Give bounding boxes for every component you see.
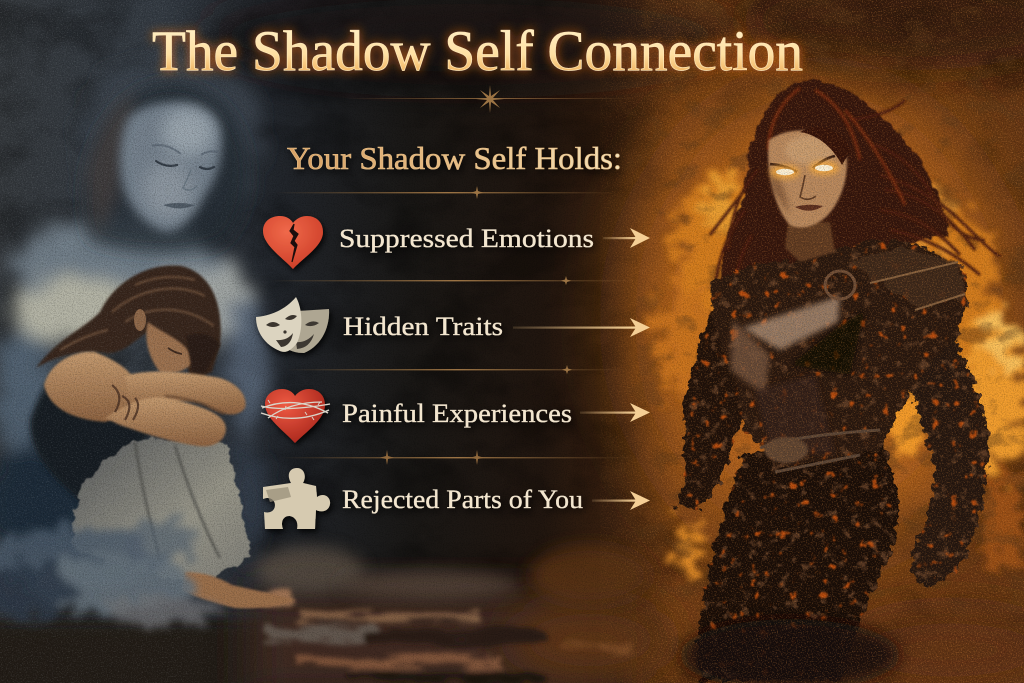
- icon: broken heart: [263, 216, 323, 269]
- panel: left mist and ghostly self: [0, 55, 268, 560]
- ground streaks: [262, 592, 630, 683]
- burnt blotches: [637, 0, 1024, 596]
- ornamental divider: top: [345, 85, 635, 113]
- face: [768, 130, 847, 228]
- face: [146, 322, 193, 373]
- lower forearm: [105, 397, 226, 446]
- divider 3: [285, 365, 630, 374]
- divider 1: [275, 186, 620, 199]
- lower armour skirt: [698, 445, 899, 680]
- ear: [134, 309, 146, 331]
- illustration: fiery warrior: [672, 80, 1000, 683]
- icon: puzzle piece: [263, 468, 330, 529]
- illustration: seated woman: [0, 265, 296, 625]
- upper forearm: [125, 372, 246, 414]
- hair: [36, 265, 221, 380]
- brows: [770, 156, 835, 172]
- arrow: [580, 403, 650, 422]
- hair back: [721, 80, 950, 300]
- divider 4: [280, 450, 635, 465]
- dress: [73, 438, 251, 582]
- row: hidden traits: [256, 297, 650, 353]
- belt buckle: [764, 437, 808, 463]
- label: Suppressed Emotions: [339, 224, 594, 253]
- mist cloud: [0, 55, 268, 560]
- arrow: [513, 318, 650, 337]
- hair strands: [710, 88, 1000, 300]
- flames: [657, 170, 1024, 577]
- label: Hidden Traits: [343, 312, 503, 341]
- hair over face: [186, 333, 220, 375]
- label: Rejected Parts of You: [342, 485, 583, 514]
- icon: heart with thorns: [261, 389, 330, 443]
- ghost woman: [84, 83, 249, 252]
- pauldron: [850, 246, 966, 310]
- row: rejected parts: [263, 468, 650, 529]
- left arm: [672, 300, 750, 510]
- panel: right fire: [600, 0, 1024, 683]
- dark top: [30, 350, 150, 505]
- mist over legs: [0, 518, 215, 625]
- torso armour: [711, 240, 968, 470]
- belt: [760, 430, 880, 472]
- label: Painful Experiences: [342, 399, 572, 428]
- shoulder and upper arm: [44, 352, 135, 422]
- row: suppressed emotions: [263, 216, 650, 269]
- divider 2: [270, 276, 640, 285]
- ring buckle: [825, 271, 855, 299]
- right arm and gauntlet: [905, 295, 989, 586]
- row: painful experiences: [261, 389, 650, 443]
- panel: floor and ground: [0, 545, 670, 683]
- arm fold shadow: [165, 396, 224, 414]
- title: The Shadow Self Connection: [152, 20, 803, 83]
- hand fingers: [112, 385, 138, 420]
- icon: theatre masks: [256, 297, 329, 353]
- glowing eyes: [770, 161, 839, 179]
- chest highlights: [742, 296, 840, 350]
- neck: [785, 222, 835, 262]
- arrow: [603, 228, 650, 248]
- heading: Your Shadow Self Holds:: [287, 140, 622, 176]
- feet: [182, 572, 296, 608]
- ground dissolve: [680, 619, 900, 683]
- arrow: [592, 491, 650, 510]
